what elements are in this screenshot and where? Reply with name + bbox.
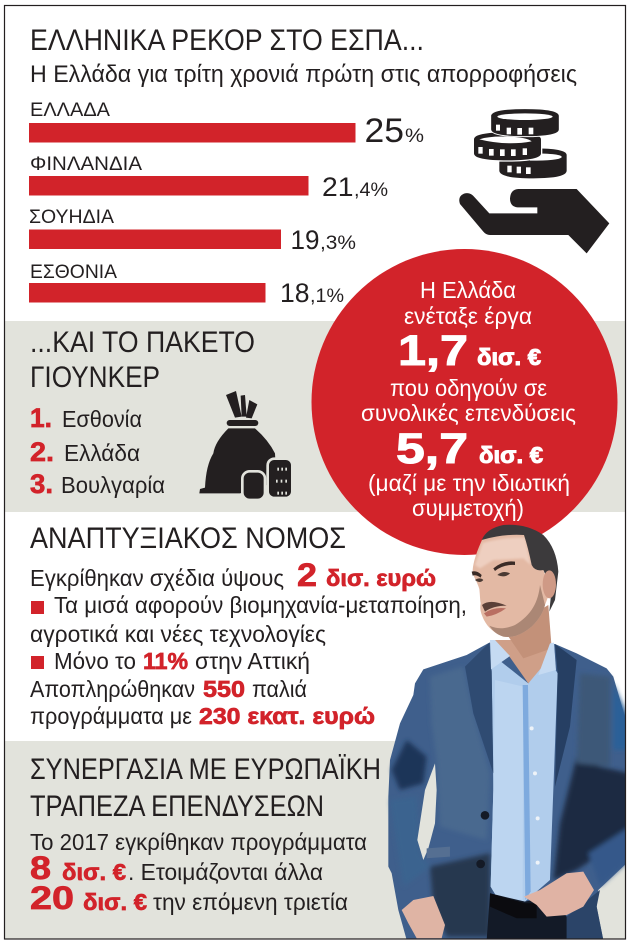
ranking list: Ελλάδα xyxy=(64,440,140,466)
text block: bullets: παλιά xyxy=(252,676,307,702)
text block: programmes xyxy=(30,829,367,916)
bar: Greece: 25 xyxy=(364,112,404,150)
subtitle: Η Ελλάδα για τρίτη χρονιά πρώτη στις απορροφήσεις xyxy=(30,61,577,88)
callout: red circle with investments: (μαζί με την ιδιωτική xyxy=(368,470,570,496)
text block: programmes: δισ. € xyxy=(62,859,126,885)
text block: bullets: αγροτικά και νέες τεχνολογίες xyxy=(30,621,326,647)
text block: bullets: Τα μισά αφορούν βιομηχανία-μεταποίηση, xyxy=(54,592,467,618)
photo: minister standing xyxy=(388,525,630,940)
bar: Greece: ΕΛΛΑΔΑ xyxy=(30,100,110,121)
bar: Finland: ,4% xyxy=(354,180,388,201)
ranking list: 2. xyxy=(30,437,54,467)
text block: programmes: . Ετοιμάζονται άλλα xyxy=(128,859,323,885)
heading xyxy=(30,753,381,823)
text block: bullets: 230 εκατ. ευρώ xyxy=(199,703,375,729)
heading: ΑΝΑΠΤΥΞΙΑΚΟΣ ΝΟΜΟΣ xyxy=(30,522,346,555)
callout: red circle with investments: 5,7 xyxy=(396,425,468,473)
bar: Estonia: ,1% xyxy=(310,286,344,307)
bar: Finland: ΦΙΝΛΑΝΔΙΑ xyxy=(30,154,142,175)
ranking list xyxy=(30,403,165,499)
callout: red circle with investments xyxy=(312,249,618,555)
heading: ΓΙΟΥΝΚΕΡ xyxy=(30,361,160,394)
icon: hand with coins xyxy=(459,109,609,253)
icon: money bag xyxy=(199,391,292,500)
text block: programmes: δισ. € xyxy=(83,889,147,915)
text block: programmes: 20 xyxy=(30,880,74,916)
bar chart xyxy=(29,100,424,308)
bar: Sweden: 19 xyxy=(290,225,320,255)
title: ΕΛΛΗΝΙΚΑ ΡΕΚΟΡ ΣΤΟ ΕΣΠΑ... xyxy=(30,24,424,57)
text block: bullets: 11% xyxy=(143,648,188,674)
text block: bullets: 550 xyxy=(203,676,245,702)
text block: bullets: προγράμματα με xyxy=(30,703,192,729)
heading: ...ΚΑΙ ΤΟ ΠΑΚΕΤΟ xyxy=(30,326,255,359)
callout: red circle with investments: Η Ελλάδα xyxy=(420,277,516,303)
bar: Greece xyxy=(29,100,424,150)
text block: programmes: 8 xyxy=(30,850,51,886)
text block: bullets: Μόνο το xyxy=(54,648,136,674)
text block: bullets xyxy=(30,592,467,729)
callout: red circle with investments: που οδηγούν σε xyxy=(390,375,547,401)
callout: red circle with investments: συμμετοχή) xyxy=(412,495,524,521)
bar: Estonia: 18 xyxy=(280,278,310,308)
bar: Sweden: ΣΟΥΗΔΙΑ xyxy=(29,207,114,228)
callout: red circle with investments: δισ. € xyxy=(479,442,543,468)
text block: approved plans xyxy=(30,557,436,593)
bar: Estonia: ΕΣΘΟΝΙΑ xyxy=(30,262,117,283)
bar: Estonia xyxy=(29,262,344,308)
heading: ΤΡΑΠΕΖΑ ΕΠΕΝΔΥΣΕΩΝ xyxy=(30,790,324,823)
heading xyxy=(30,326,255,394)
heading: ΣΥΝΕΡΓΑΣΙΑ ΜΕ ΕΥΡΩΠΑΪΚΗ xyxy=(30,753,381,786)
text block: bullets: Αποπληρώθηκαν xyxy=(30,676,195,702)
panel: development law xyxy=(30,522,467,729)
text block: approved plans: δισ. ευρώ xyxy=(326,565,436,591)
text block: programmes: Το 2017 εγκρίθηκαν προγράμματα xyxy=(30,829,367,855)
ranking list: 1. xyxy=(30,403,52,433)
panel: European Investment Bank xyxy=(30,753,381,916)
bar: Sweden: ,3% xyxy=(320,233,356,254)
bar: Sweden xyxy=(29,207,356,255)
text block: approved plans: Εγκρίθηκαν σχέδια ύψους xyxy=(30,565,284,591)
callout: red circle with investments: ενέταξε έργα xyxy=(404,303,532,329)
bar: Finland: 21 xyxy=(322,172,354,202)
ranking list: 3. xyxy=(30,469,53,499)
callout: red circle with investments: συνολικές επενδύσεις xyxy=(361,400,576,426)
panel: Juncker package xyxy=(30,326,292,500)
bar: Finland xyxy=(29,154,388,202)
text block: bullets: στην Αττική xyxy=(195,648,310,674)
ranking list: Εσθονία xyxy=(62,406,142,432)
callout: red circle with investments: 1,7 xyxy=(398,327,468,375)
ranking list: Βουλγαρία xyxy=(61,472,165,498)
text block: programmes: την επόμενη τριετία xyxy=(153,889,348,915)
panel: ESPA absorption records xyxy=(29,24,577,308)
bar: Greece: % xyxy=(405,126,424,147)
callout: red circle with investments: δισ. € xyxy=(477,344,541,370)
text block: approved plans: 2 xyxy=(297,557,317,593)
